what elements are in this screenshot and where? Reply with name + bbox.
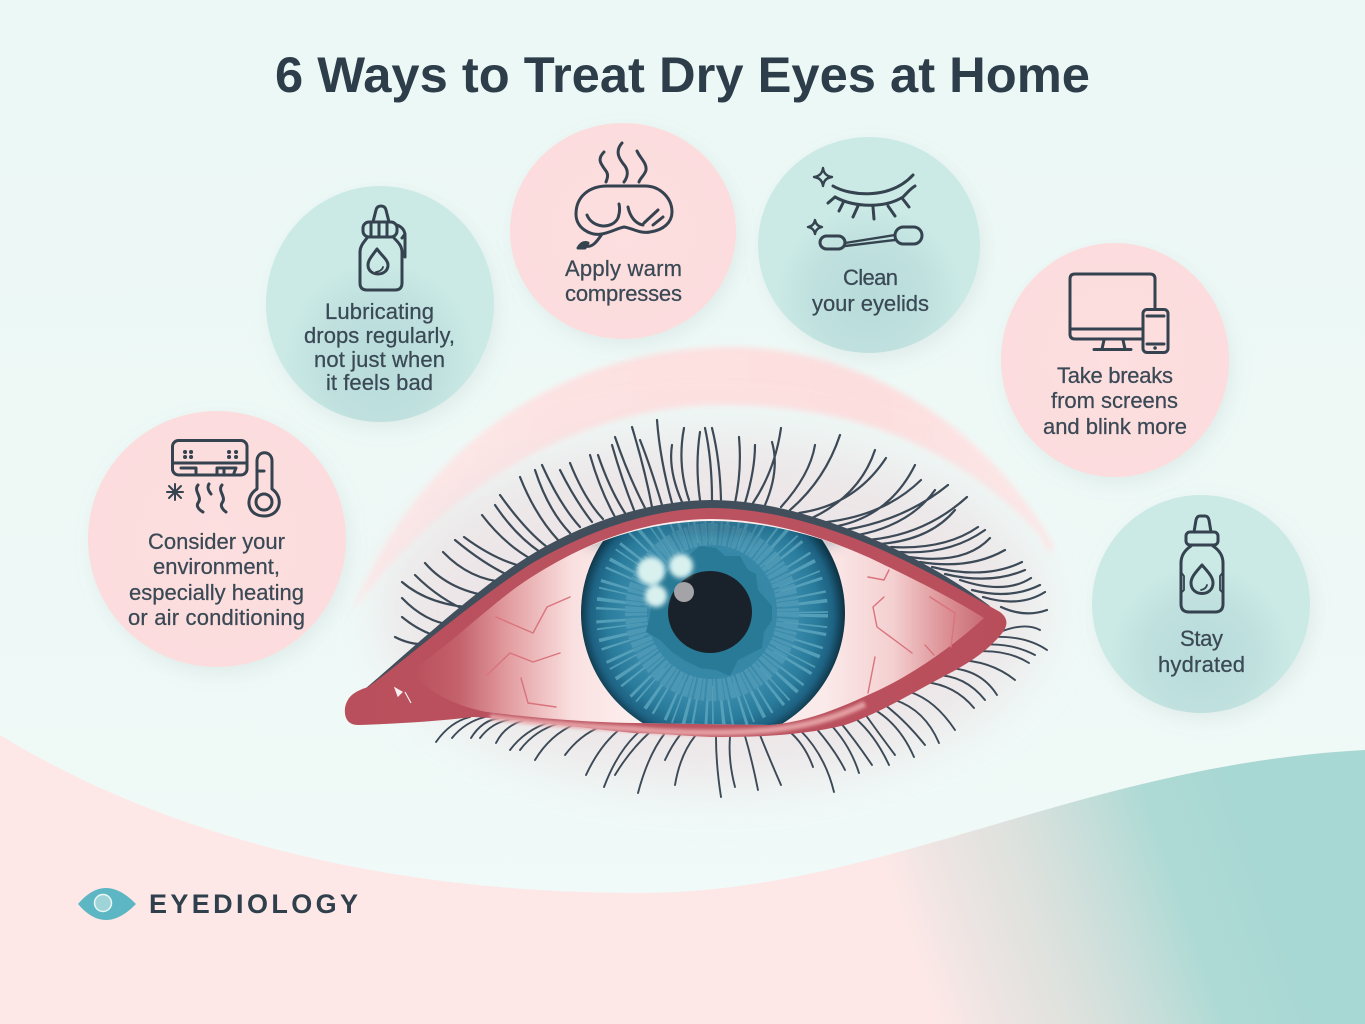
text xyxy=(812,265,929,316)
red eyelid rim xyxy=(345,508,1006,737)
soft skin shadow around eye xyxy=(382,435,1042,785)
panel: lubricating drops xyxy=(266,186,494,422)
dark collarette xyxy=(646,546,772,676)
circle xyxy=(758,137,980,353)
circle xyxy=(266,186,494,422)
iris outer fibres xyxy=(618,520,806,708)
text xyxy=(304,299,455,395)
caruncle highlights xyxy=(395,688,411,703)
text: it feels bad xyxy=(326,370,433,395)
text xyxy=(565,256,682,306)
icon: water bottle xyxy=(1181,516,1223,612)
circle xyxy=(510,123,736,339)
text xyxy=(1158,626,1245,677)
panel: screen breaks xyxy=(1001,243,1229,477)
brand name: EYEDIOLOGY xyxy=(149,889,358,919)
pupil reflection xyxy=(674,582,694,602)
text: Lubricating xyxy=(325,299,434,324)
text xyxy=(128,529,305,630)
circle xyxy=(88,411,346,667)
logo: Eyediology xyxy=(78,888,358,920)
upper eyelashes xyxy=(395,420,1047,644)
icon: monitor and phone xyxy=(1070,274,1168,352)
text: especially heating xyxy=(129,580,304,605)
iris inner light ring xyxy=(636,534,788,690)
iris xyxy=(581,521,845,725)
iris base xyxy=(581,521,845,725)
lower rim highlight xyxy=(490,704,865,733)
icon: eyelid, sparkles and cotton swab xyxy=(808,168,922,249)
text: Apply warm xyxy=(565,256,682,281)
text: or air conditioning xyxy=(128,605,305,630)
text: and blink more xyxy=(1043,414,1187,439)
text: environment, xyxy=(153,554,280,579)
eyebrow arc xyxy=(352,347,1053,612)
pupil xyxy=(668,571,752,653)
icon: air conditioner and thermometer xyxy=(167,440,279,516)
text xyxy=(1043,363,1187,439)
text: Take breaks xyxy=(1057,363,1173,388)
eye illustration xyxy=(345,420,1047,797)
iris top shadow xyxy=(590,522,835,545)
icon: logo eye xyxy=(78,888,136,920)
title: 6 Ways to Treat Dry Eyes at Home xyxy=(275,47,1090,103)
icon: steaming eye mask xyxy=(576,143,672,248)
text: from screens xyxy=(1051,388,1178,413)
text: not just when xyxy=(314,347,445,372)
panel: clean eyelids xyxy=(758,137,980,353)
lower eyelashes xyxy=(436,626,1047,797)
text: hydrated xyxy=(1158,652,1245,677)
circle xyxy=(1001,243,1229,477)
text: Consider your xyxy=(148,529,285,554)
sclera xyxy=(412,519,984,725)
text: compresses xyxy=(565,281,682,306)
text: Clean xyxy=(843,265,898,290)
bottom teal wave shading xyxy=(0,735,1365,1024)
icon: dropper bottle xyxy=(360,206,405,290)
iris highlights xyxy=(637,554,693,607)
text: your eyelids xyxy=(812,291,929,316)
panel: stay hydrated xyxy=(1092,495,1310,713)
blood vessels xyxy=(487,570,955,707)
bottom pink wave xyxy=(0,735,1365,1024)
text: drops regularly, xyxy=(304,323,455,348)
text: Stay xyxy=(1180,626,1223,651)
dark upper lid liner xyxy=(366,500,990,692)
panel: warm compresses xyxy=(510,123,736,339)
circle xyxy=(1092,495,1310,713)
panel: environment xyxy=(88,411,346,667)
